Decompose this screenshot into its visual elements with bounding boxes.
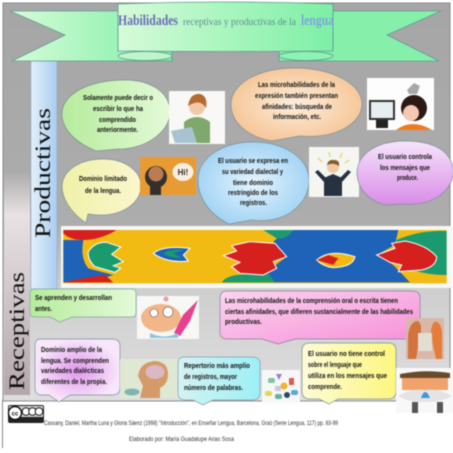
- icon: colourful chat bubbles: [262, 370, 300, 403]
- speech bubble: Solamente puede decir: [62, 80, 170, 151]
- speech bubble: Solamente puede decir: comprendido: [99, 115, 136, 124]
- callout: Se aprenden: antes.: [35, 304, 52, 313]
- callout: no tiene control: sobre el lenguaje que: [308, 360, 362, 369]
- callout: Repertorio: número de palabras.: [184, 383, 243, 392]
- speech bubble: microhabilidades expresion: información, etc.: [273, 112, 321, 121]
- speech bubble: controla mensajes: produce.: [397, 173, 418, 182]
- callout: Se aprenden: Se aprenden y desarrollan: [35, 293, 112, 302]
- icon: head with question marks and Hi: Hi!: [178, 168, 188, 177]
- speech bubble: controla mensajes: los mensajes que: [380, 163, 430, 172]
- icon: head with question marks and Hi: [140, 157, 196, 195]
- speech bubble: microhabilidades expresion: expresión también presentan: [255, 91, 338, 100]
- licence badge: [8, 405, 44, 423]
- callout: no tiene control: utiliza en los mensajes que: [308, 371, 387, 380]
- side band: Receptivas: [4, 170, 30, 395]
- speech bubble: Dominio limitado: [62, 159, 141, 223]
- callout: Dominio amplio: [35, 339, 120, 402]
- callout: Dominio amplio: diferentes de la propia.: [41, 377, 107, 386]
- speech bubble: variedad dialectal: [198, 142, 309, 224]
- callout: Dominio amplio: Dominio amplio de la: [41, 345, 103, 354]
- icon: confused man: [309, 147, 359, 197]
- icon: two heads with text: [406, 318, 444, 359]
- label: Receptivas: Receptivas: [4, 272, 29, 390]
- speech bubble: variedad dialectal: tiene dominio: [233, 178, 273, 187]
- icon: speechless man: [396, 368, 453, 413]
- icon: woman at laptop: [169, 91, 225, 144]
- callout: Dominio amplio: variedades dialécticas: [41, 366, 104, 375]
- speech bubble: controla mensajes: El usuario controla: [378, 152, 433, 161]
- citation: Cassany, Daniel, Martha Luna y Gloria Sáenz (1998) "Introducción", en Enseñar Lengua, Barcelona, Graó (Serie Lengua, 117) pp. 83-99: [44, 420, 338, 427]
- speech bubble: Solamente puede decir: escribir lo que ha: [93, 104, 144, 113]
- icon: baby reading: [137, 296, 199, 339]
- speech bubble: Dominio limitado: de la lengua.: [85, 186, 121, 195]
- side band: Productivas: [30, 61, 57, 289]
- callout: Repertorio: Repertorio más amplio: [184, 361, 250, 370]
- callout: Repertorio: de registros, mayor: [184, 372, 237, 381]
- callout: Repertorio: [178, 357, 260, 405]
- title text: receptivas y productivas de la: [183, 17, 296, 28]
- title text: lengua: [301, 13, 334, 29]
- speech bubble: variedad dialectal: restringido de los: [228, 188, 278, 197]
- callout: no tiene control: comprende.: [308, 382, 342, 391]
- callout: Dominio amplio: lengua. Se comprenden: [41, 356, 109, 365]
- speech bubble: variedad dialectal: su variedad dialectal y: [222, 167, 284, 176]
- title text: [118, 13, 334, 29]
- speech bubble: microhabilidades expresion: [231, 68, 362, 141]
- icon: head with brain: [120, 359, 178, 398]
- callout: microhabilidades comprension: [220, 291, 420, 344]
- callout: microhabilidades comprension: productivas.: [225, 317, 262, 326]
- image band: facing profile faces: [61, 226, 452, 288]
- callout: no tiene control: El usuario no tiene control: [308, 349, 385, 358]
- speech bubble: controla mensajes: [357, 141, 453, 205]
- title ribbon: [10, 2, 441, 61]
- title text: Habilidades: [118, 13, 178, 29]
- callout: Se aprenden: [30, 289, 136, 322]
- callout: no tiene control: [302, 343, 396, 404]
- speech bubble: variedad dialectal: registros.: [240, 198, 267, 207]
- speech bubble: Solamente puede decir: Solamente puede decir o: [83, 93, 153, 102]
- callout: microhabilidades comprension: Las microhabilidades de la comprensión oral o escrita tienen: [225, 296, 398, 305]
- credit: Elaborado por: María Guadalupe Arias Sosa: [129, 436, 234, 443]
- speech bubble: microhabilidades expresion: Las microhabilidades de la: [258, 80, 336, 89]
- label: Productivas: Productivas: [30, 108, 55, 238]
- speech bubble: microhabilidades expresion: afinidades: búsqueda de: [262, 102, 332, 111]
- speech bubble: Solamente puede decir: anteriormente.: [97, 125, 138, 134]
- speech bubble: Dominio limitado: Dominio limitado: [79, 174, 127, 183]
- licence badge: cc: [12, 412, 19, 418]
- icon: child at computer: [367, 78, 434, 130]
- speech bubble: variedad dialectal: El usuario se expresa en: [218, 156, 288, 165]
